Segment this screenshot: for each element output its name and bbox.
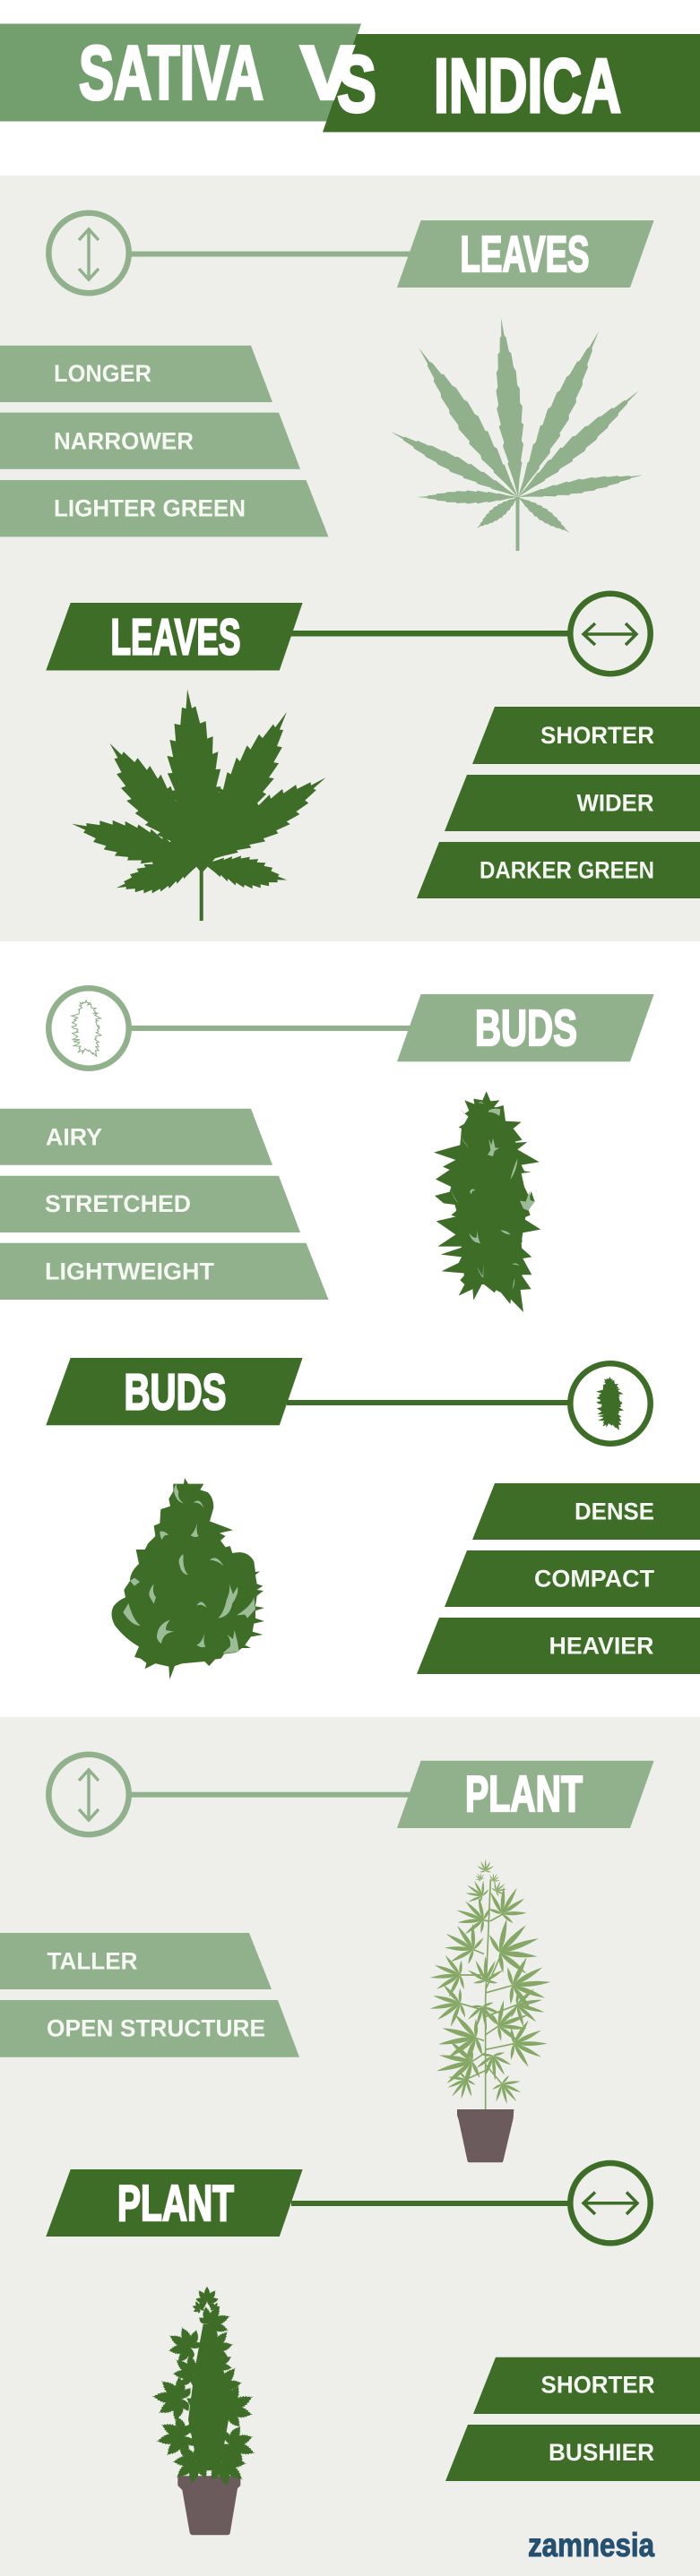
title banner: Sativa vs Indica: S <box>337 39 376 129</box>
indica plant header <box>46 2163 651 2243</box>
indica plant list: SHORTER <box>541 2372 654 2399</box>
indica buds list <box>417 1483 700 1674</box>
indica leaves list: SHORTER <box>540 722 654 749</box>
section background: leaves <box>0 176 700 941</box>
indica leaves header <box>46 594 651 674</box>
sativa leaves header <box>48 213 654 293</box>
sativa plant list: OPEN STRUCTURE <box>47 2014 265 2041</box>
section background: plant <box>0 1717 700 2576</box>
logo: zamnesia: zamnesia <box>528 2527 654 2563</box>
indica buds header: BUDS <box>124 1364 226 1421</box>
indica plant list: BUSHIER <box>549 2439 654 2466</box>
icon: bud outline in circle <box>48 988 129 1069</box>
indica leaves header: LEAVES <box>111 610 240 666</box>
sativa leaves list: LIGHTER GREEN <box>54 494 246 521</box>
sativa buds list: STRETCHED <box>45 1190 191 1217</box>
illustration: sativa plant in pot <box>426 1859 553 2162</box>
sativa plant header <box>48 1755 654 1834</box>
indica plant list <box>445 2357 700 2481</box>
illustration: indica bud <box>112 1478 264 1679</box>
sativa buds header <box>48 988 654 1069</box>
title banner: Sativa vs Indica: V <box>300 30 354 116</box>
pot <box>177 2476 240 2535</box>
icon: vertical arrow in circle <box>48 1755 129 1834</box>
illustration: indica plant in pot <box>150 2286 264 2535</box>
indica leaves list <box>417 707 700 898</box>
title banner: Sativa vs Indica <box>0 23 700 133</box>
indica leaves list: WIDER <box>577 790 654 817</box>
icon: vertical arrow in circle <box>48 213 129 293</box>
icon: horizontal arrow in circle <box>570 2163 651 2243</box>
indica buds list: COMPACT <box>534 1566 654 1593</box>
illustration: sativa leaf <box>386 317 645 551</box>
illustration: sativa bud <box>434 1091 540 1312</box>
sativa buds list <box>0 1109 328 1300</box>
sativa plant header: PLANT <box>465 1766 583 1823</box>
sativa buds header: BUDS <box>475 1000 577 1057</box>
icon: solid bud in circle <box>570 1363 651 1444</box>
sativa leaves list <box>0 346 328 537</box>
sativa buds list: AIRY <box>46 1124 102 1151</box>
title banner: Sativa vs Indica: SATIVA <box>79 31 264 116</box>
indica buds list: HEAVIER <box>549 1633 654 1660</box>
pot <box>457 2109 514 2162</box>
indica buds header <box>46 1358 651 1444</box>
title banner: Sativa vs Indica: INDICA <box>434 44 621 129</box>
sativa buds list: LIGHTWEIGHT <box>45 1258 214 1285</box>
sativa leaves list: LONGER <box>54 360 151 387</box>
sativa plant list <box>0 1933 299 2057</box>
illustration: indica leaf <box>66 687 336 921</box>
indica buds list: DENSE <box>575 1498 654 1525</box>
icon: horizontal arrow in circle <box>570 594 651 674</box>
sativa leaves list: NARROWER <box>54 428 194 455</box>
indica leaves list: DARKER GREEN <box>480 857 654 884</box>
indica plant header: PLANT <box>117 2176 234 2232</box>
sativa leaves header: LEAVES <box>461 227 590 283</box>
sativa plant list: TALLER <box>47 1948 138 1975</box>
